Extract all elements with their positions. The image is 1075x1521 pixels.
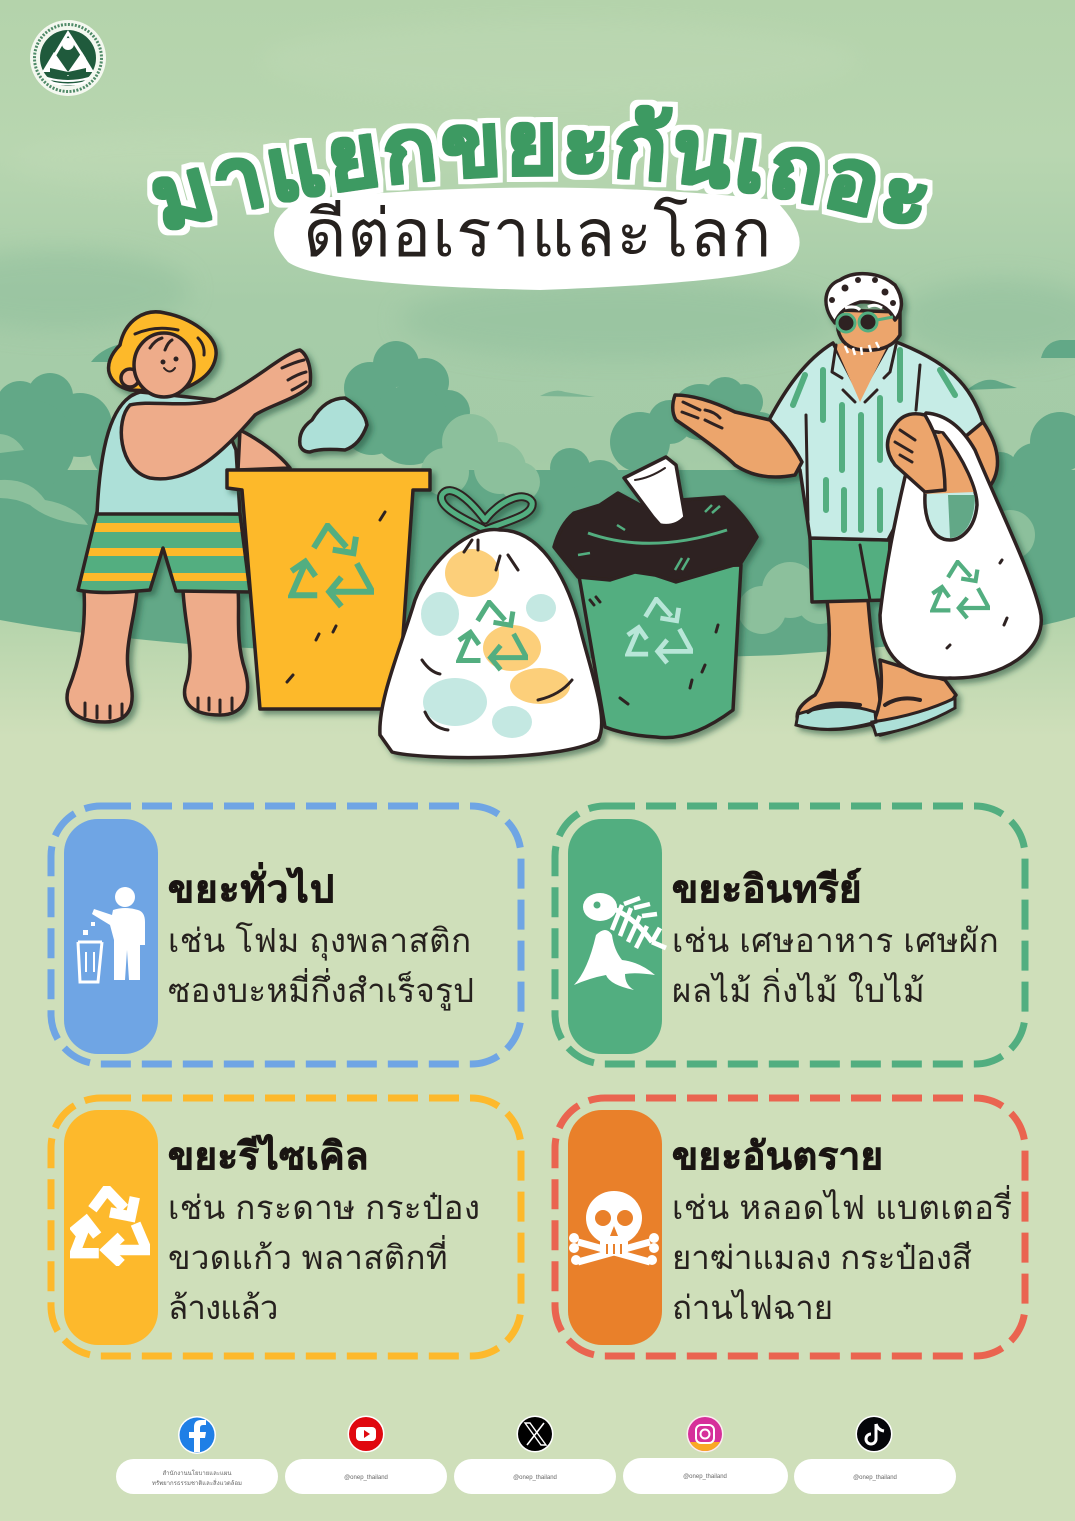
panel: organic waste bbox=[555, 806, 1025, 1064]
pill: tiktok handle bbox=[794, 1459, 956, 1494]
person left: boy with hat bbox=[67, 312, 311, 722]
icon: instagram bbox=[686, 1416, 724, 1452]
pill: office name: ทรัพยากรธรรมชาติและสิ่งแวดล้อม bbox=[152, 1479, 242, 1487]
text: recyclable waste examples: ล้างแล้ว bbox=[168, 1289, 278, 1326]
person right: man with sunglasses bbox=[673, 274, 1041, 735]
text: organic waste examples: เช่น เศษอาหาร เศษผัก bbox=[672, 922, 999, 959]
panel: recyclable waste bbox=[51, 1098, 521, 1356]
text: hazardous waste examples: เช่น หลอดไฟ แบตเตอรี่ bbox=[672, 1185, 1013, 1226]
icon: youtube bbox=[348, 1416, 384, 1452]
text: organic waste examples bbox=[672, 922, 999, 1009]
text: general waste examples: ซองบะหมี่กึ่งสำเร็จรูป bbox=[168, 968, 474, 1011]
heading: general waste: ขยะทั่วไป bbox=[168, 862, 335, 911]
heading: hazardous waste: ขยะอันตราย bbox=[672, 1136, 884, 1178]
pill: X handle bbox=[454, 1459, 616, 1494]
text: general waste examples bbox=[168, 922, 474, 1011]
icon: recycle bbox=[72, 1190, 147, 1264]
pill: instagram handle: @onep_thailand bbox=[683, 1474, 727, 1480]
crumpled paper bbox=[300, 398, 367, 452]
pill: office name bbox=[116, 1459, 278, 1494]
text: recyclable waste examples: เช่น กระดาษ กระป๋อง bbox=[168, 1189, 481, 1226]
text: organic waste examples: ผลไม้ กิ่งไม้ ใบไม้ bbox=[672, 968, 925, 1009]
text: recyclable waste examples: ขวดแก้ว พลาสติกที่ bbox=[168, 1235, 448, 1276]
icon: facebook bbox=[178, 1416, 216, 1454]
panel: general waste bbox=[51, 806, 521, 1064]
background trees bbox=[0, 340, 1075, 658]
title: มาแยกขยะกันเถอะ bbox=[147, 100, 932, 236]
pill: tiktok handle: @onep_thailand bbox=[853, 1475, 897, 1481]
logo bbox=[30, 20, 106, 96]
subtitle pill: ดีต่อเราและโลก bbox=[303, 196, 773, 270]
pill: instagram handle bbox=[623, 1458, 788, 1494]
heading: organic waste: ขยะอินทรีย์ bbox=[672, 868, 862, 911]
heading: recyclable waste: ขยะรีไซเคิล bbox=[168, 1134, 369, 1178]
light clouds bbox=[0, 414, 1035, 634]
yellow bin bbox=[227, 470, 430, 709]
icon: person with trash bin bbox=[78, 887, 145, 982]
text: general waste examples: เช่น โฟม ถุงพลาสติก bbox=[168, 922, 472, 961]
icon: skull and crossbones bbox=[569, 1191, 659, 1265]
text: hazardous waste examples: ยาฆ่าแมลง กระป๋องสี bbox=[672, 1239, 972, 1276]
icon: X bbox=[516, 1416, 554, 1452]
pill: youtube handle bbox=[285, 1459, 447, 1494]
panel: hazardous waste bbox=[555, 1098, 1025, 1356]
pill: youtube handle: @onep_thailand bbox=[344, 1475, 388, 1481]
pill: office name: สำนักงานนโยบายและแผน bbox=[163, 1469, 231, 1477]
footer: social links bbox=[116, 1416, 956, 1494]
icon: tiktok bbox=[856, 1416, 892, 1452]
text: recyclable waste examples bbox=[168, 1189, 481, 1326]
icon: fish bone and banana peel bbox=[574, 893, 666, 990]
subtitle pill bbox=[274, 188, 800, 290]
pill: X handle: @onep_thailand bbox=[513, 1475, 557, 1481]
green bin with black liner and cup bbox=[554, 457, 757, 738]
text: hazardous waste examples bbox=[672, 1185, 1013, 1326]
white garbage bag bbox=[380, 491, 602, 758]
text: hazardous waste examples: ถ่านไฟฉาย bbox=[672, 1289, 833, 1326]
